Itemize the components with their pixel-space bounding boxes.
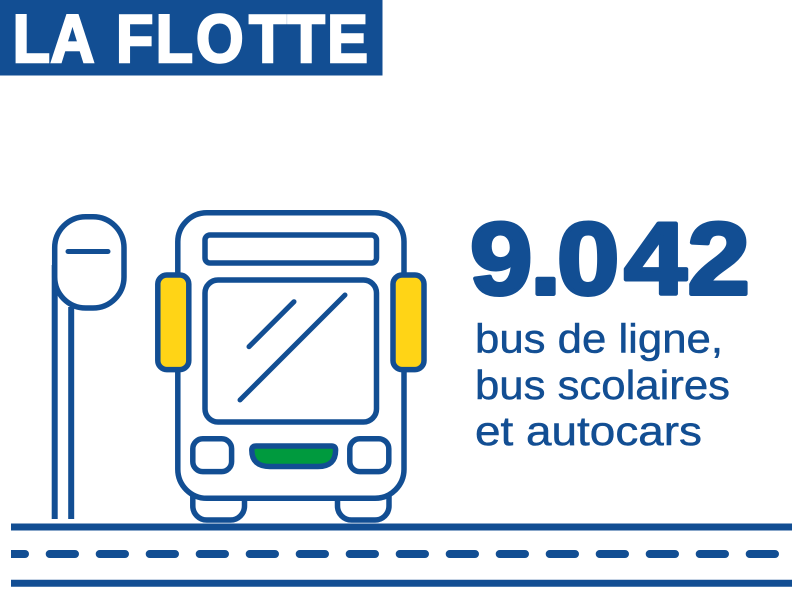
- banner background: [0, 0, 382, 76]
- road centre dashes: [50, 550, 775, 558]
- line 1: bus de ligne,: [475, 316, 723, 362]
- left wheel: [193, 495, 244, 520]
- description text: [475, 316, 730, 454]
- right mirror: [393, 275, 424, 370]
- green grille: [252, 446, 336, 466]
- windshield long glare: [240, 295, 345, 400]
- statistic: [470, 202, 750, 454]
- title: La Flotte: LA FLOTTE: [13, 0, 368, 77]
- destination sign: [205, 235, 376, 263]
- right headlight: [350, 439, 389, 472]
- windshield: [205, 280, 376, 422]
- left headlight: [193, 439, 232, 472]
- title banner: [0, 0, 382, 77]
- left mirror: [158, 275, 189, 370]
- bus body: [178, 213, 404, 498]
- road bottom edge: [11, 580, 792, 587]
- road first dash: [11, 550, 29, 558]
- right wheel: [338, 495, 389, 520]
- stop pole: [55, 265, 71, 519]
- icon: bus front: [158, 213, 424, 520]
- icon: bus stop sign: [55, 217, 124, 519]
- stop panel: [55, 217, 124, 308]
- road: [11, 527, 792, 583]
- line 2: bus scolaires: [475, 362, 730, 408]
- windshield short glare: [249, 302, 294, 347]
- line 3: et autocars: [475, 408, 702, 454]
- number: 9.042: 9.042: [470, 202, 750, 316]
- stop panel dash: [68, 249, 108, 254]
- road top edge: [11, 524, 792, 530]
